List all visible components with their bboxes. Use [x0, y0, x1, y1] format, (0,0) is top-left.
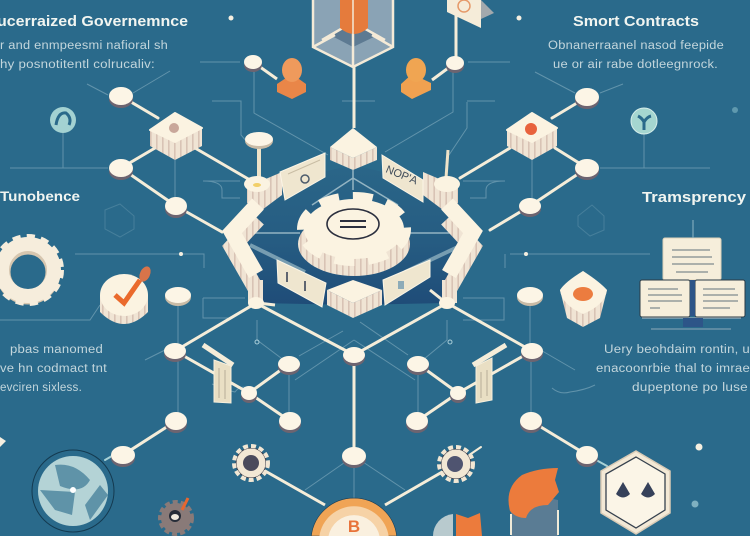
icon: bitcoin coin	[311, 498, 397, 536]
icon: person right	[401, 58, 431, 99]
text: left lower description: ve hn codmact tnt	[0, 363, 108, 375]
heading: transparency: Tramsprency	[642, 189, 747, 206]
icon: documents	[640, 220, 745, 329]
block node: left	[150, 113, 202, 160]
icon: right shield	[560, 271, 607, 327]
icon: pie fragment	[433, 513, 482, 536]
central ring	[232, 128, 473, 318]
text: governance description: hy posnotitentl colrucaliv:	[0, 59, 155, 71]
inner spoke lines	[248, 170, 462, 272]
text: left lower description: evciren sixless.	[0, 382, 82, 394]
text: smart contracts description: Obnanerraanel nasod feepide	[548, 40, 724, 52]
ring: left arc	[232, 172, 282, 309]
central gear	[298, 196, 410, 276]
text: right lower description	[596, 344, 750, 394]
icon: flag	[447, 0, 494, 28]
text: governance description: r and enmpeesmi nafioral sh	[0, 40, 168, 52]
card: lower right	[383, 260, 430, 305]
ring: top block	[330, 128, 377, 170]
ring: bottom block	[327, 280, 382, 318]
card: lower left	[277, 260, 326, 307]
signpost: lower right	[473, 345, 506, 403]
text: smart contracts description: ue or air rabe dotleegnrock.	[553, 59, 718, 71]
icon: check badge	[100, 265, 153, 324]
icon: right small circle	[631, 108, 657, 134]
thin connector lines	[0, 62, 710, 500]
icon: person left	[277, 58, 306, 99]
card: upper right	[382, 155, 423, 202]
text: governance description	[0, 40, 168, 71]
icon: top cube	[313, 0, 393, 67]
icon: left gear	[0, 237, 61, 303]
node: round nodes	[109, 55, 599, 468]
text: smart contracts description	[548, 40, 724, 71]
icon: small gear left	[234, 446, 268, 480]
inner dark hexagon floor	[230, 165, 478, 305]
text: left lower description	[0, 344, 108, 394]
card: upper right: NOP'A	[384, 164, 420, 187]
heading: decentralized governance: ucerraized Governemnce	[0, 13, 188, 30]
icon: left small circle	[50, 107, 76, 133]
main thick connectors	[105, 15, 607, 505]
icon: hexagon token	[601, 451, 670, 534]
heading: smart contracts: Smort Contracts	[573, 13, 699, 30]
icon: small gear right	[439, 447, 473, 481]
card: upper left	[280, 153, 325, 200]
mushroom pins	[165, 132, 543, 306]
gear badge: equals	[327, 209, 379, 239]
heading: tunobence: Tunobence	[0, 189, 81, 204]
text: right lower description: Uery beohdaim rontin, u	[604, 344, 750, 356]
icon: orange shape with pie	[508, 468, 559, 536]
text: right lower description: enacoonrbie thal to imrae	[596, 363, 750, 375]
icon: globe	[32, 450, 114, 532]
ring: right arc	[423, 172, 473, 309]
signpost: lower left	[203, 345, 233, 403]
icon: bitcoin coin: B	[348, 517, 360, 536]
block node: right	[507, 113, 557, 160]
text: right lower description: dupeptone po luse	[632, 382, 748, 394]
text: left lower description: pbas manomed	[10, 344, 103, 356]
icon: bottom gear	[160, 498, 192, 534]
